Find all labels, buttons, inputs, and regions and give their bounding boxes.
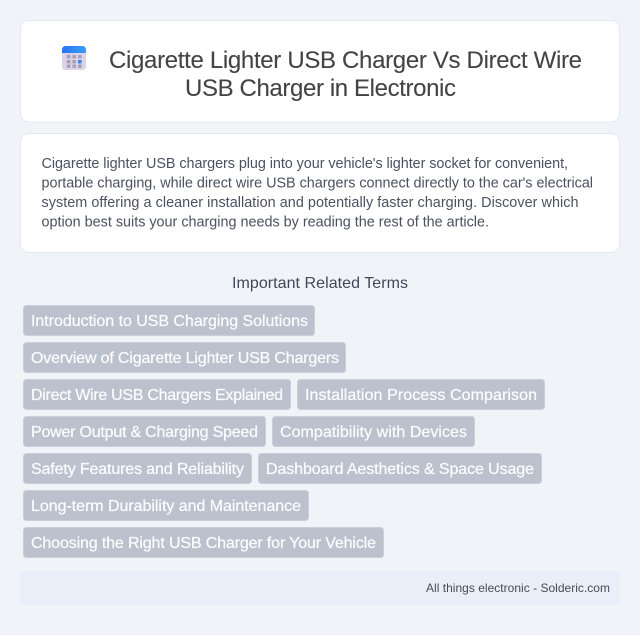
tag: direct wire: Direct Wire USB Chargers Explained — [31, 387, 283, 404]
footer — [20, 571, 620, 605]
tag: durability: Long-term Durability and Maintenance — [31, 498, 301, 515]
tag: safety — [24, 454, 252, 484]
tag: compatibility — [272, 416, 474, 446]
footer: All things electronic - Solderic.com — [426, 581, 610, 595]
tag: power output — [24, 416, 266, 446]
tag: direct wire — [24, 380, 290, 410]
tag: introduction: Introduction to USB Charging Solutions — [31, 313, 308, 330]
title — [109, 47, 582, 102]
heading: important related terms: Important Related Terms — [232, 275, 408, 292]
tag: choosing: Choosing the Right USB Charger for Your Vehicle — [31, 535, 376, 552]
tag: choosing — [24, 528, 384, 558]
tag: durability — [24, 490, 308, 520]
tag: overview: Overview of Cigarette Lighter USB Chargers — [31, 350, 339, 367]
text block: intro paragraph: Cigarette lighter USB chargers plug into your vehicle's lighter socket for convenient, — [42, 156, 568, 172]
panel: header — [20, 20, 620, 122]
text block: intro paragraph: option best suits your charging needs by reading the rest of the article. — [42, 214, 489, 230]
text block: intro paragraph: system offering a cleaner installation and potentially faster charging. Discover which — [42, 195, 578, 211]
panel: intro text — [20, 134, 620, 252]
tag: safety: Safety Features and Reliability — [31, 461, 244, 478]
tag: installation: Installation Process Comparison — [305, 387, 537, 404]
title: Cigarette Lighter USB Charger Vs Direct Wire — [109, 47, 582, 74]
tag: power output: Power Output & Charging Speed — [31, 424, 258, 441]
icon: calendar — [62, 46, 86, 70]
tag: installation — [298, 380, 544, 410]
text block: intro paragraph — [42, 156, 593, 230]
tag: overview — [24, 342, 346, 372]
tag: dashboard — [258, 454, 542, 484]
text block: intro paragraph: portable charging, while direct wire USB chargers connect directly to the car's electrical — [42, 176, 593, 192]
title: USB Charger in Electronic — [185, 75, 456, 102]
tag: introduction — [24, 306, 314, 336]
tag: compatibility: Compatibility with Devices — [280, 424, 467, 441]
tag: dashboard: Dashboard Aesthetics & Space Usage — [266, 461, 534, 478]
